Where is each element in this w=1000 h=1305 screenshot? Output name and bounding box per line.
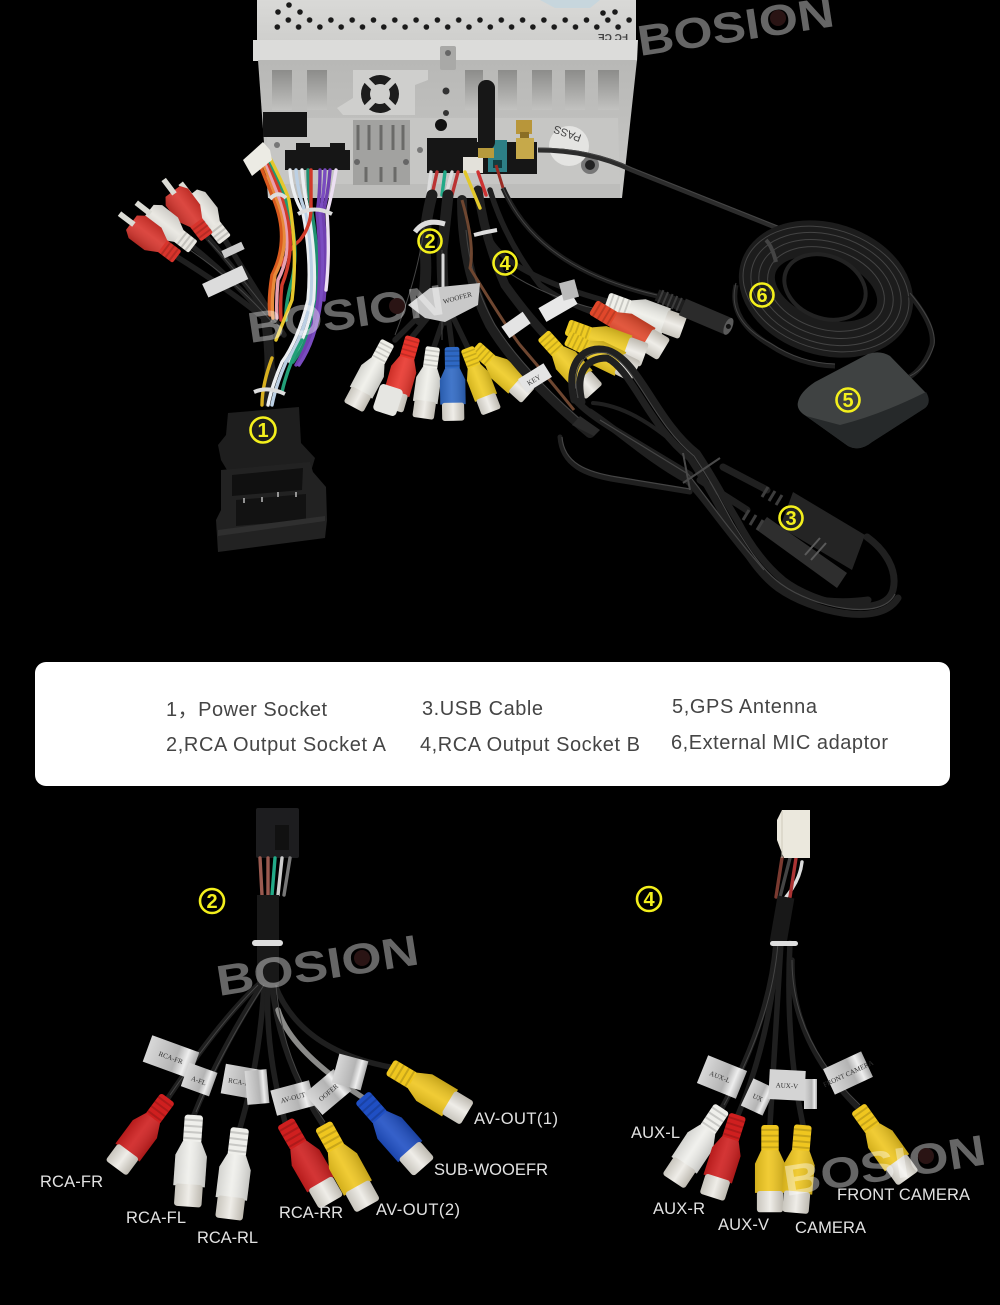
mic cable xyxy=(496,165,657,296)
section 2 marker xyxy=(200,889,224,913)
legend item 2: 2,RCA Output Socket A xyxy=(166,734,387,756)
marker 3 xyxy=(780,506,802,530)
section 4 tags: UX xyxy=(751,1092,764,1104)
section 4 cable tie xyxy=(770,941,798,946)
section 4 labels: FRONT CAMERA xyxy=(837,1186,970,1204)
section 4 tags: AUX-L xyxy=(708,1069,731,1085)
section 4 RCA plugs xyxy=(661,1099,920,1214)
section 2 labels: RCA-RL xyxy=(197,1229,258,1247)
marker 6: 6 xyxy=(756,285,768,307)
GPS antenna cable and coil xyxy=(538,148,934,378)
USB cable xyxy=(560,349,898,614)
legend item 1: 1，Power Socket xyxy=(166,699,327,721)
section 2 tags: OOFER xyxy=(317,1082,340,1103)
section 4 tags: FRONT CAMERA xyxy=(822,1059,875,1089)
mic jack xyxy=(653,288,736,336)
PASS sticker xyxy=(549,122,589,166)
RCA male tags xyxy=(202,242,248,298)
antenna connectors xyxy=(478,80,534,159)
PASS sticker: PASS xyxy=(552,122,583,143)
section 4 marker: 4 xyxy=(643,889,655,911)
marker 2 xyxy=(418,230,442,253)
section 2 tags xyxy=(143,1035,368,1116)
section 4 connector xyxy=(777,810,810,858)
section 2 cable tie xyxy=(252,940,283,946)
cable ties on harness 2 xyxy=(415,222,497,235)
section 4 labels: AUX-R xyxy=(653,1200,705,1218)
marker 4 xyxy=(494,252,516,275)
black cables over plugs with brown wire xyxy=(462,200,590,433)
cable ties on power harness xyxy=(254,194,332,394)
marker 1: 1 xyxy=(257,420,269,442)
section 2 labels: SUB-WOOEFR xyxy=(434,1161,548,1179)
section 4 labels: CAMERA xyxy=(795,1219,866,1237)
small black connector xyxy=(572,416,600,436)
section 2 labels: RCA-FR xyxy=(40,1173,103,1191)
legend item 4: 4,RCA Output Socket B xyxy=(420,734,640,756)
rear sockets xyxy=(274,138,537,174)
legend item 5: 5,GPS Antenna xyxy=(672,696,818,718)
section 2 tags: A-FL xyxy=(190,1075,207,1087)
head unit chassis: FC CE xyxy=(598,31,628,42)
power wires xyxy=(258,158,336,405)
section 4 harness cables xyxy=(722,858,860,1125)
head unit chassis xyxy=(253,0,638,198)
watermark middle: BOSION xyxy=(244,276,447,353)
marker 2: 2 xyxy=(424,231,436,253)
harness 2 cables top xyxy=(395,172,610,348)
RCA male plugs xyxy=(111,171,236,268)
marker 4: 4 xyxy=(499,253,511,275)
legend item 6: 6,External MIC adaptor xyxy=(671,732,888,754)
section 2 tags: AV-OUT xyxy=(280,1091,307,1105)
legend panel xyxy=(35,662,950,786)
section 4 labels xyxy=(631,1124,970,1237)
RCA male cables xyxy=(177,237,284,402)
watermark section 4: BOSION xyxy=(780,1127,989,1206)
section 4 tags xyxy=(697,1049,879,1116)
GPS puck xyxy=(798,352,929,448)
marker 3: 3 xyxy=(785,508,797,530)
white connector on power harness xyxy=(243,142,272,176)
legend item 3: 3.USB Cable xyxy=(422,698,543,720)
section 4 marker xyxy=(637,887,661,911)
watermark section 2: BOSION xyxy=(213,927,422,1006)
middle silver tags xyxy=(408,279,579,393)
section 2 labels: AV-OUT(2) xyxy=(376,1201,460,1219)
section 4 labels: AUX-V xyxy=(718,1216,769,1234)
fan vent xyxy=(337,70,428,115)
USB jacks xyxy=(743,487,865,588)
section 2 labels: RCA-RR xyxy=(279,1204,343,1222)
section 2 tags: RCA-RL xyxy=(228,1076,254,1089)
section 2 labels: AV-OUT(1) xyxy=(474,1110,558,1128)
middle silver tags: KEY xyxy=(526,373,542,388)
marker 6 xyxy=(750,284,774,307)
section 4 tags: AUX-V xyxy=(775,1081,798,1091)
marker 5 xyxy=(836,388,860,412)
section 2 tags: RCA-FR xyxy=(157,1050,184,1066)
marker 5: 5 xyxy=(842,390,854,412)
section 2 labels: RCA-FL xyxy=(126,1209,186,1227)
section 2 harness cables xyxy=(168,808,390,1128)
marker 1 xyxy=(250,418,276,442)
section 2 marker: 2 xyxy=(206,891,218,913)
section 2 RCA plugs xyxy=(104,1054,475,1221)
power connector xyxy=(216,407,327,552)
middle RCA plugs xyxy=(342,287,688,421)
section 4 labels: AUX-L xyxy=(631,1124,680,1142)
section 2 labels xyxy=(40,1110,558,1247)
middle silver tags: WOOFER xyxy=(442,290,473,306)
